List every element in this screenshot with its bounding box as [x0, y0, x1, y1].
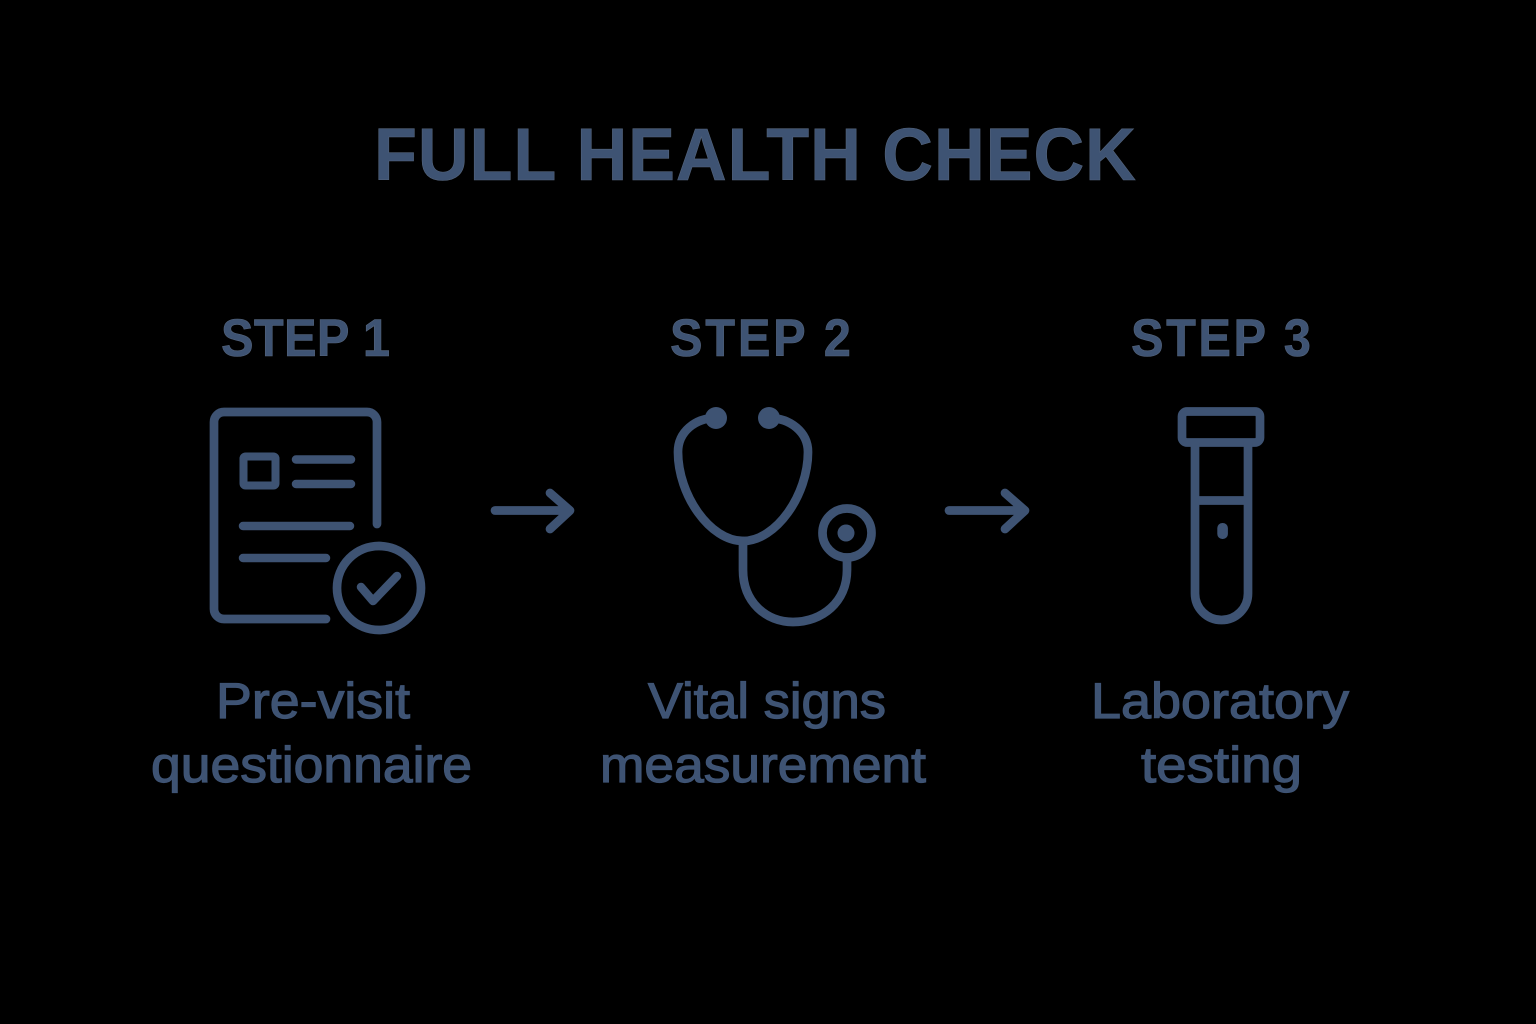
- panel: step 2: [600, 308, 926, 793]
- step 1 description: [151, 673, 472, 793]
- step 2 description: Vital signs: [648, 673, 886, 729]
- step 2 heading: STEP 2: [670, 308, 851, 367]
- step 1 description: Pre-visit: [216, 673, 410, 729]
- icon: questionnaire document with check mark: [214, 412, 421, 630]
- step 2 description: [600, 673, 926, 793]
- step 1 description: questionnaire: [151, 737, 472, 793]
- icon: stethoscope: [678, 407, 872, 622]
- step 3 heading: STEP 3: [1131, 308, 1311, 367]
- step 3 description: testing: [1141, 737, 1302, 793]
- panel: step 3: [1091, 308, 1349, 793]
- step 2 description: measurement: [600, 737, 926, 793]
- step 1 heading: STEP 1: [221, 308, 390, 367]
- step 3 description: Laboratory: [1091, 673, 1349, 729]
- step 3 description: [1091, 673, 1349, 793]
- arrow: step 1 to step 2: [495, 493, 570, 529]
- panel: step 1: [151, 308, 472, 793]
- icon: test tube: [1182, 412, 1260, 620]
- title: FULL HEALTH CHECK: [374, 114, 1136, 196]
- arrow: step 2 to step 3: [949, 493, 1025, 529]
